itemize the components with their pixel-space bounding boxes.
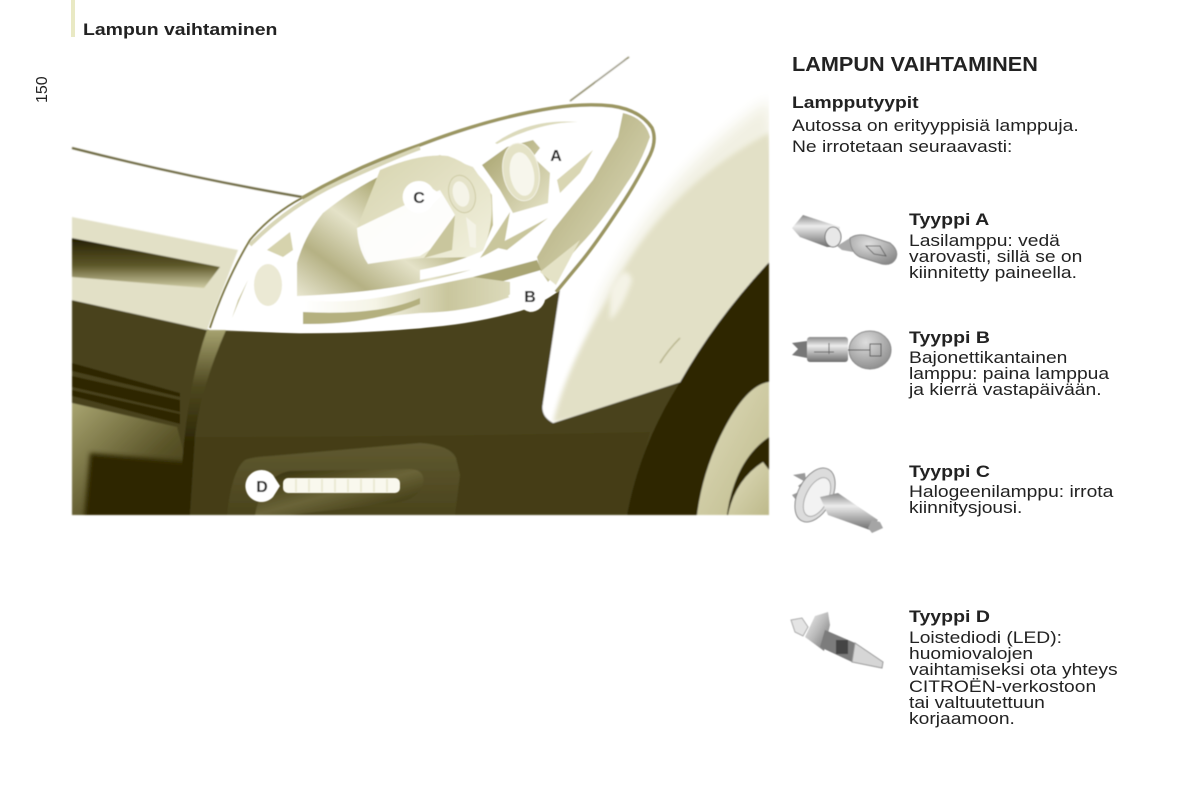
wheel bbox=[697, 382, 769, 515]
bulb icon: type B bbox=[792, 331, 891, 369]
type A text: varovasti, sillä se on bbox=[909, 248, 1082, 266]
outer band bbox=[537, 113, 650, 282]
lens bbox=[210, 105, 654, 333]
dark stripes bbox=[72, 363, 180, 424]
lower gold strip bbox=[473, 260, 541, 285]
type B text: lamppu: paina lamppua bbox=[909, 365, 1109, 383]
DRL light bar bbox=[283, 478, 400, 493]
white bar bbox=[357, 190, 455, 264]
type D text: Loistediodi (LED): bbox=[909, 629, 1062, 647]
type D text: CITROËN-verkostoon bbox=[909, 678, 1096, 696]
type D text: huomiovalojen bbox=[909, 645, 1033, 663]
type C text: Halogeenilamppu: irrota bbox=[909, 483, 1113, 501]
pillar bbox=[180, 330, 226, 515]
intro text bbox=[792, 117, 1079, 156]
small arc above A bbox=[495, 121, 578, 144]
marker B bbox=[508, 281, 545, 312]
reflector bbox=[357, 156, 492, 263]
running header: Lampun vaihtaminen bbox=[83, 21, 277, 39]
intro text: Autossa on erityyppisiä lamppuja. bbox=[792, 117, 1079, 135]
main heading: LAMPUN VAIHTAMINEN bbox=[792, 54, 1038, 76]
left details bbox=[267, 232, 293, 257]
car body dark panel bbox=[72, 290, 680, 515]
marker C bbox=[403, 181, 442, 213]
marker B: B bbox=[524, 289, 536, 306]
lens outline top bbox=[210, 198, 302, 328]
type B text: Tyyppi B bbox=[909, 329, 990, 347]
marker D: D bbox=[256, 479, 268, 496]
inner dark cavity bbox=[297, 155, 493, 296]
side fin bbox=[550, 150, 593, 203]
fender bbox=[541, 59, 770, 424]
intro text: Ne irrotetaan seuraavasti: bbox=[792, 138, 1012, 156]
wheel arch bbox=[627, 262, 769, 515]
headlight bbox=[210, 105, 654, 502]
type A text: Lasilamppu: vedä bbox=[909, 232, 1060, 250]
bulb C reflector bbox=[445, 172, 479, 216]
bulb icon: type D bbox=[791, 612, 883, 668]
marker C: C bbox=[413, 190, 425, 207]
lower strip bbox=[303, 277, 510, 323]
type B text: ja kierrä vastapäivään. bbox=[909, 381, 1102, 399]
type D text: Tyyppi D bbox=[909, 608, 990, 626]
type C text bbox=[909, 463, 1114, 517]
marker D bbox=[245, 470, 280, 502]
top body line bbox=[72, 148, 302, 197]
type D text: vaihtamiseksi ota yhteys bbox=[909, 661, 1118, 679]
accent bar bbox=[71, 0, 75, 37]
type B text: Bajonettikantainen bbox=[909, 349, 1067, 367]
grille upper cream panel bbox=[72, 217, 238, 330]
type D text bbox=[909, 608, 1118, 728]
lower bumper shade bbox=[182, 432, 650, 515]
type A text: Tyyppi A bbox=[909, 211, 989, 229]
type A text bbox=[909, 211, 1082, 282]
DRL housing bbox=[227, 443, 460, 515]
type D text: tai valtuutettuun bbox=[909, 694, 1045, 712]
lower left intake bbox=[72, 403, 190, 520]
page number: 150 bbox=[34, 76, 51, 103]
illustration: headlight and car front bbox=[70, 56, 898, 669]
type C text: Tyyppi C bbox=[909, 463, 990, 481]
type C text: kiinnitysjousi. bbox=[909, 499, 1022, 517]
type B text bbox=[908, 329, 1110, 399]
subheading: Lampputyypit bbox=[792, 94, 919, 112]
grille slot bbox=[72, 238, 220, 288]
marker A: A bbox=[550, 148, 562, 165]
marker A bbox=[541, 140, 571, 170]
bulb icon: type C bbox=[787, 461, 883, 533]
projector A housing bbox=[482, 140, 550, 213]
bulb icon: type A bbox=[792, 215, 897, 264]
type D text: korjaamoon. bbox=[909, 710, 1015, 728]
type A text: kiinnitetty paineella. bbox=[909, 264, 1077, 282]
swoosh bbox=[420, 205, 560, 280]
